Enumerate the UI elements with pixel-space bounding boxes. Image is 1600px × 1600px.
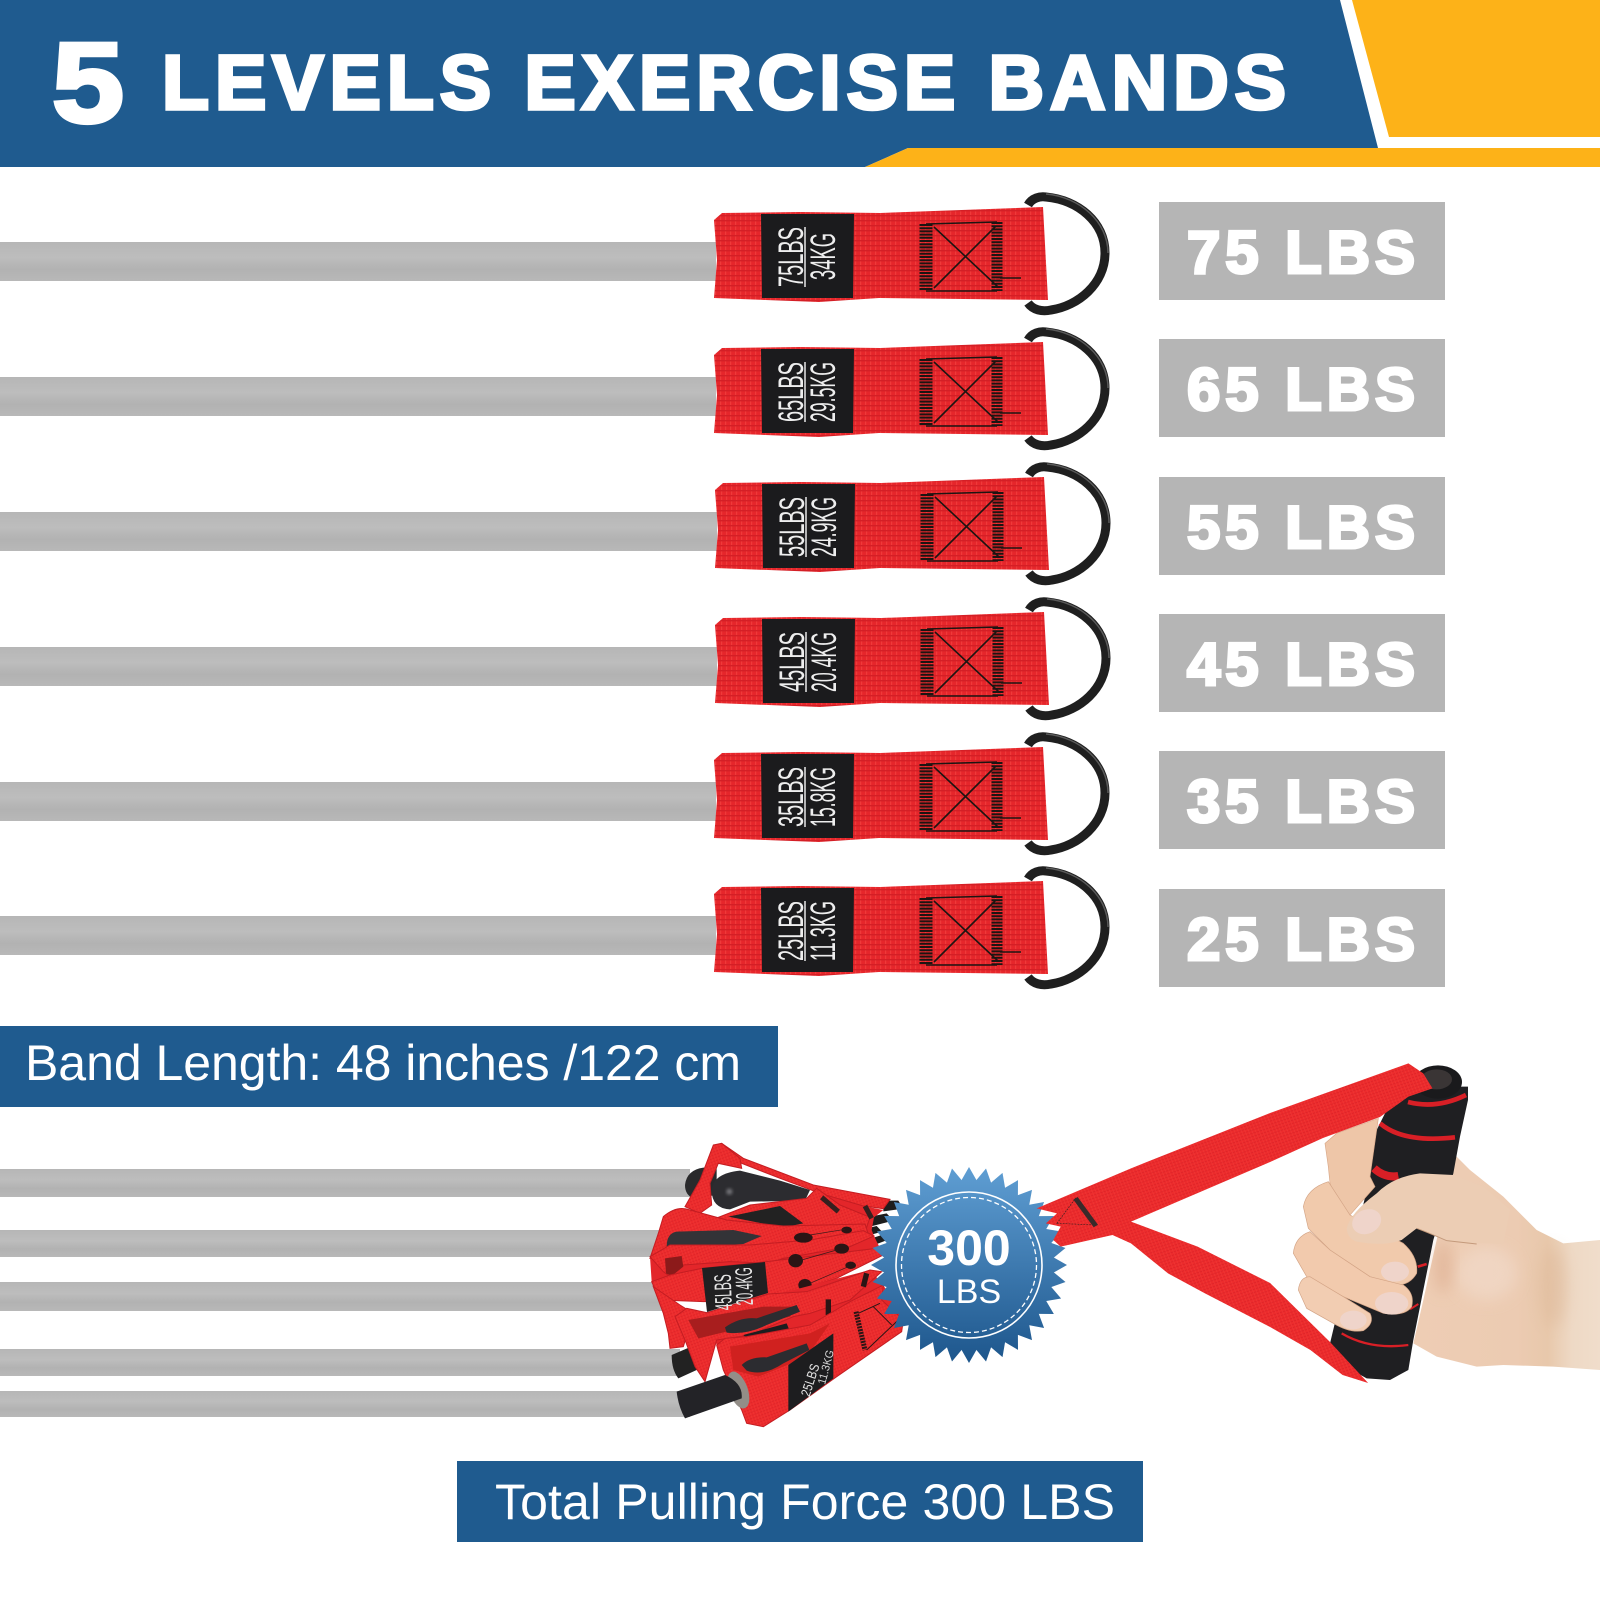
top strap left leg	[685, 1143, 742, 1213]
badge star	[871, 1167, 1067, 1363]
palm lower shadow	[1435, 1240, 1452, 1293]
strap stitching	[1057, 1198, 1096, 1226]
stitching marks	[788, 1227, 856, 1291]
second strap	[718, 1188, 870, 1230]
tag label text	[772, 767, 843, 827]
tag label text: 24.9KG	[805, 497, 844, 557]
front strap label	[788, 1333, 837, 1412]
connector inside third strap	[667, 1230, 762, 1248]
total pulling force callout: Total Pulling Force 300 LBS	[495, 1474, 1115, 1530]
middle strap black strip	[743, 1323, 789, 1338]
middle strap stitching	[828, 1273, 867, 1315]
band row: 55 lbs	[0, 464, 1445, 581]
front knob cylinder	[677, 1375, 742, 1418]
partial label, second strap	[728, 1206, 803, 1227]
weight label 65 lbs	[1159, 339, 1445, 437]
45 lbs label in bundle: 45LBS	[710, 1274, 738, 1311]
title: LEVELS EXERCISE BANDS	[162, 40, 1286, 126]
band row: 75 lbs	[0, 194, 1445, 311]
strap loop to handle	[1037, 1063, 1433, 1383]
badge unit: LBS	[937, 1273, 1001, 1311]
tag label text	[773, 497, 844, 557]
thumb crease	[1417, 1228, 1477, 1244]
tag label text: 15.8KG	[804, 767, 843, 827]
handle stripes	[1342, 1095, 1466, 1346]
fingernails	[1340, 1204, 1409, 1329]
ring tips	[860, 1201, 903, 1247]
little finger	[1298, 1277, 1371, 1331]
band length callout	[0, 1026, 778, 1107]
thin stitching lines	[802, 1229, 848, 1283]
front connector	[742, 1343, 809, 1373]
weight label 45 lbs: 45 LBS	[1187, 631, 1415, 698]
top strap strip	[722, 1143, 890, 1209]
front strap stitching	[856, 1303, 900, 1350]
band row: 35 lbs	[0, 734, 1445, 851]
back strap	[653, 1287, 693, 1348]
front strap	[717, 1285, 903, 1427]
weight label 55 lbs	[1159, 477, 1445, 575]
fourth knob	[672, 1345, 697, 1378]
45 lbs label in bundle: 20.4KG	[731, 1267, 759, 1306]
third strap	[650, 1208, 868, 1258]
fourth strap	[650, 1231, 874, 1277]
top strap stitching	[822, 1197, 872, 1218]
front strap hollow	[730, 1323, 830, 1377]
strap backing	[650, 1193, 883, 1300]
fifth strap	[652, 1248, 883, 1302]
ring finger	[1293, 1232, 1412, 1314]
tag label text	[772, 227, 843, 287]
metal ring	[723, 1369, 754, 1411]
tag label text: 25LBS	[772, 901, 811, 961]
tag label text: 34KG	[804, 233, 843, 280]
tag label text: 55LBS	[773, 497, 812, 557]
foam handle	[1330, 1065, 1468, 1380]
palm shading	[1540, 1247, 1567, 1327]
handle top cap	[1414, 1065, 1462, 1099]
top knob	[685, 1168, 717, 1198]
tag label text: 45LBS	[773, 632, 812, 692]
middle strap	[675, 1270, 882, 1382]
yellow lower stripe	[865, 148, 1600, 167]
band row: 45 lbs	[0, 599, 1445, 716]
lower stacked bands	[0, 1169, 690, 1417]
weight label 35 lbs	[1159, 751, 1445, 849]
band length callout: Band Length: 48 inches /122 cm	[25, 1035, 741, 1091]
tag label text: 11.3KG	[804, 901, 843, 961]
weight label 25 lbs: 25 LBS	[1187, 906, 1415, 973]
band row: 65 lbs	[0, 329, 1445, 446]
dark hollow	[665, 1256, 683, 1276]
middle strap hollow	[688, 1307, 797, 1338]
tag label text: 35LBS	[772, 767, 811, 827]
45 lbs label in bundle	[702, 1262, 768, 1312]
tag label text: 29.5KG	[804, 362, 843, 422]
middle finger	[1303, 1182, 1417, 1285]
top connector	[712, 1171, 810, 1209]
middle connector	[725, 1305, 800, 1333]
band row: 25 lbs	[0, 868, 1445, 987]
tag label text	[772, 362, 843, 422]
badge rings	[896, 1192, 1042, 1338]
strap backing	[707, 1270, 903, 1427]
front strap label: 11.3KG	[816, 1349, 837, 1386]
total pulling force callout	[457, 1461, 1143, 1542]
tag label text	[773, 632, 844, 692]
hand palm and wrist	[1413, 1155, 1600, 1370]
weight label 65 lbs: 65 LBS	[1187, 356, 1415, 423]
yellow corner block	[1352, 0, 1600, 137]
index finger	[1325, 1118, 1378, 1215]
weight label 55 lbs: 55 LBS	[1187, 494, 1415, 561]
fingers and thumb	[1293, 1173, 1510, 1331]
bundle of strap handles, upper part	[650, 1143, 903, 1302]
title number: 5	[52, 20, 124, 147]
badge: 300 lbs	[871, 1167, 1067, 1363]
header banner	[0, 0, 1600, 167]
weight label 75 lbs	[1159, 202, 1445, 300]
tag label text: 20.4KG	[805, 632, 844, 692]
front strap label: 25LBS	[798, 1362, 823, 1398]
tag label text: 75LBS	[772, 227, 811, 287]
weight label 25 lbs	[1159, 889, 1445, 987]
thumb	[1347, 1173, 1510, 1244]
bundle of strap handles, lower part	[653, 1270, 903, 1427]
weight label 45 lbs	[1159, 614, 1445, 712]
tag label text	[772, 901, 843, 961]
palm highlight	[1457, 1247, 1517, 1300]
badge number: 300	[927, 1220, 1011, 1276]
weight label 75 lbs: 75 LBS	[1187, 219, 1415, 286]
weight label 35 lbs: 35 LBS	[1187, 768, 1415, 835]
tag label text: 65LBS	[772, 362, 811, 422]
